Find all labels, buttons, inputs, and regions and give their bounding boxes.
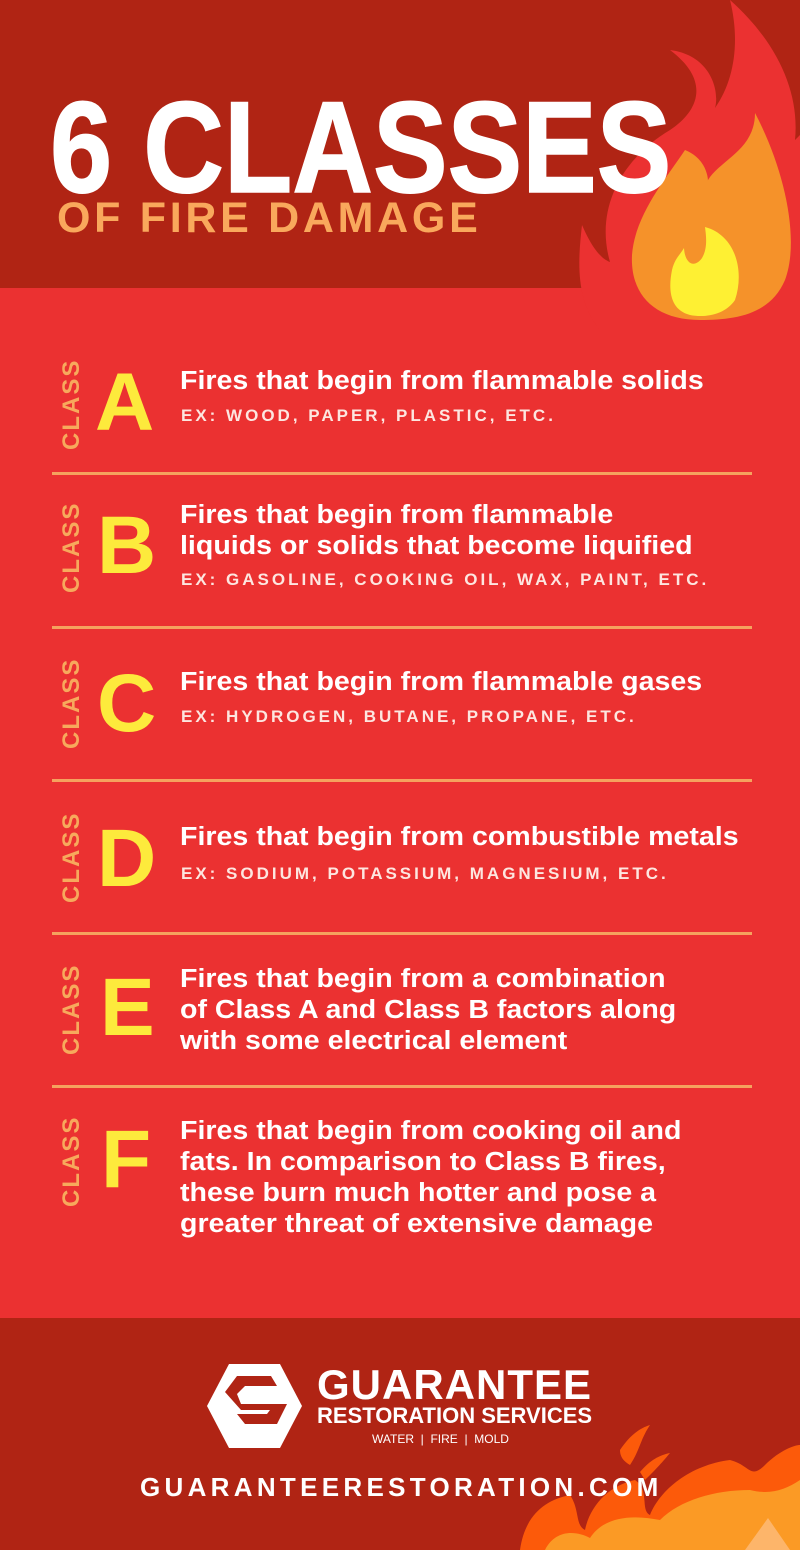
panel: class C <box>58 658 702 749</box>
logo: GUARANTEE <box>317 1361 592 1408</box>
panel: class D: Fires that begin from combustible metals <box>180 823 739 851</box>
icon: logo hexagon G <box>207 1364 302 1448</box>
panel: class B: Fires that begin from flammable <box>180 501 613 529</box>
panel: class A: CLASS <box>58 359 85 450</box>
panel: class A <box>58 357 704 450</box>
panel: class C: C <box>97 658 156 749</box>
website url: GUARANTEERESTORATION.COM <box>140 1472 663 1502</box>
panel: class B: EX: GASOLINE, COOKING OIL, WAX, PAINT, ETC. <box>181 570 709 589</box>
panel: class E: CLASS <box>58 964 85 1055</box>
icon: big flame <box>579 0 800 320</box>
panel: class E: E <box>100 962 155 1053</box>
panel: class F: F <box>101 1114 151 1205</box>
panel: class A: A <box>95 357 154 448</box>
panel: class C: Fires that begin from flammable gases <box>180 668 702 696</box>
panel: class E: with some electrical element <box>180 1027 567 1055</box>
icon: bottom flames <box>520 1425 800 1550</box>
panel: class F <box>58 1114 681 1238</box>
panel: class D: D <box>97 813 156 904</box>
title: 6 CLASSES <box>50 74 671 220</box>
panel: class E: of Class A and Class B factors along <box>180 996 676 1024</box>
panel: class C: CLASS <box>58 658 85 749</box>
panel: class D <box>58 812 739 904</box>
panel: class C: EX: HYDROGEN, BUTANE, PROPANE, ETC. <box>181 707 637 726</box>
panel: class B: liquids or solids that become liquified <box>180 532 693 560</box>
panel: class F: these burn much hotter and pose a <box>180 1179 656 1207</box>
subtitle: OF FIRE DAMAGE <box>57 194 481 242</box>
panel: class D: EX: SODIUM, POTASSIUM, MAGNESIUM, ETC. <box>181 864 669 883</box>
panel: class A: Fires that begin from flammable solids <box>180 367 704 395</box>
logo <box>207 1361 592 1448</box>
logo: RESTORATION SERVICES <box>317 1403 592 1428</box>
panel: class F: Fires that begin from cooking oil and <box>180 1117 681 1145</box>
panel: class A: EX: WOOD, PAPER, PLASTIC, ETC. <box>181 406 556 425</box>
panel: class E: Fires that begin from a combination <box>180 965 666 993</box>
panel: class F: greater threat of extensive damage <box>180 1210 653 1238</box>
panel: class D: CLASS <box>58 812 85 903</box>
footer background <box>0 1318 800 1550</box>
panel: class F: CLASS <box>58 1116 85 1207</box>
panel: class B: CLASS <box>58 502 85 593</box>
logo: WATER | FIRE | MOLD <box>372 1432 509 1446</box>
header background <box>0 0 800 288</box>
panel: class E <box>58 962 676 1055</box>
panel: class B <box>58 500 709 593</box>
panel: class B: B <box>97 500 156 591</box>
panel: class F: fats. In comparison to Class B fires, <box>180 1148 666 1176</box>
